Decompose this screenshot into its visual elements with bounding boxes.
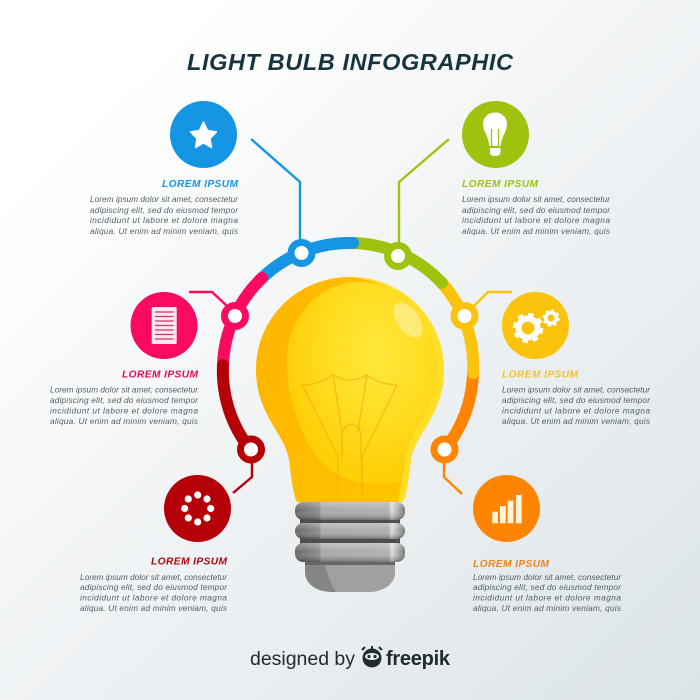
- text block: adipiscing elit, sed do eiusmod tempor: [90, 205, 239, 215]
- connector arc: [223, 243, 473, 449]
- title: LIGHT BULB INFOGRAPHIC: [187, 49, 514, 75]
- connector: orange: [434, 439, 462, 494]
- text block: aliqua. Ut enim ad minim veniam, quis: [80, 603, 227, 613]
- text block: incididunt ut labore et dolore magna: [502, 406, 650, 416]
- icon: bulb: [462, 101, 529, 168]
- icon: gears: [502, 292, 569, 359]
- icon: document: [130, 292, 198, 359]
- text block: aliqua. Ut enim ad minim veniam, quis: [50, 416, 198, 426]
- text block: Lorem ipsum dolor sit amet, consectetur: [473, 572, 622, 582]
- panel: blue star: [90, 101, 239, 236]
- arc: pink: [223, 278, 262, 365]
- text block: [80, 572, 228, 613]
- panel: yellow gears: [502, 292, 651, 426]
- heading: LOREM IPSUM: [462, 179, 538, 190]
- text block: aliqua. Ut enim ad minim veniam, quis: [502, 416, 650, 426]
- text block: adipiscing elit, sed do eiusmod tempor: [473, 582, 622, 592]
- text block: Lorem ipsum dolor sit amet, consectetur: [50, 384, 199, 394]
- filament: [302, 375, 397, 500]
- text block: incididunt ut labore et dolore magna: [473, 592, 621, 602]
- connector: blue: [251, 139, 312, 264]
- text block: aliqua. Ut enim ad minim veniam, quis: [462, 226, 610, 236]
- text block: Lorem ipsum dolor sit amet, consectetur: [502, 384, 651, 394]
- text block: incididunt ut labore et dolore magna: [50, 406, 198, 416]
- icon: dots ring: [164, 475, 231, 542]
- heading: LOREM IPSUM: [162, 179, 238, 190]
- arc: orange: [445, 373, 473, 449]
- text block: incididunt ut labore et dolore magna: [462, 215, 610, 225]
- text block: [502, 384, 651, 426]
- light bulb: [256, 277, 444, 592]
- footer credit: freepik: [386, 648, 451, 670]
- panel: orange bars: [473, 475, 622, 613]
- heading: LOREM IPSUM: [502, 370, 578, 380]
- glass highlight: [388, 297, 428, 343]
- text block: Lorem ipsum dolor sit amet, consectetur: [80, 572, 228, 582]
- text block: adipiscing elit, sed do eiusmod tempor: [50, 395, 199, 405]
- arc: dark red: [223, 365, 250, 449]
- glass rim: [350, 277, 444, 502]
- text block: [90, 194, 239, 236]
- icon: bar chart: [473, 475, 540, 542]
- text block: [462, 194, 611, 236]
- text block: adipiscing elit, sed do eiusmod tempor: [462, 205, 611, 215]
- text block: incididunt ut labore et dolore magna: [80, 592, 227, 602]
- connector: dark red: [233, 439, 262, 493]
- text block: adipiscing elit, sed do eiusmod tempor: [80, 582, 228, 592]
- glass: [256, 277, 444, 502]
- text block: [50, 384, 199, 426]
- text block: aliqua. Ut enim ad minim veniam, quis: [473, 603, 621, 613]
- footer credit: [250, 646, 451, 670]
- panel: pink document: [50, 292, 199, 426]
- glass inner light: [287, 282, 437, 484]
- connector: pink: [189, 292, 246, 326]
- heading: LOREM IPSUM: [473, 559, 550, 570]
- text block: incididunt ut labore et dolore magna: [90, 215, 238, 225]
- arc: blue: [262, 243, 353, 278]
- text block: aliqua. Ut enim ad minim veniam, quis: [90, 226, 238, 236]
- text block: Lorem ipsum dolor sit amet, consectetur: [90, 194, 239, 204]
- heading: LOREM IPSUM: [122, 370, 198, 380]
- panel: green bulb: [462, 101, 611, 236]
- bulb base: [295, 502, 405, 592]
- arc: green: [353, 243, 442, 283]
- connector: yellow: [454, 292, 512, 326]
- footer credit: designed by: [250, 648, 355, 670]
- arc: yellow: [442, 283, 473, 373]
- icon: freepik logo: [362, 646, 382, 668]
- text block: adipiscing elit, sed do eiusmod tempor: [502, 395, 651, 405]
- connector: green: [388, 139, 449, 266]
- text block: Lorem ipsum dolor sit amet, consectetur: [462, 194, 611, 204]
- icon: star: [170, 101, 237, 168]
- panel: dark red dots: [80, 475, 231, 613]
- text block: [473, 572, 622, 613]
- heading: LOREM IPSUM: [151, 556, 228, 568]
